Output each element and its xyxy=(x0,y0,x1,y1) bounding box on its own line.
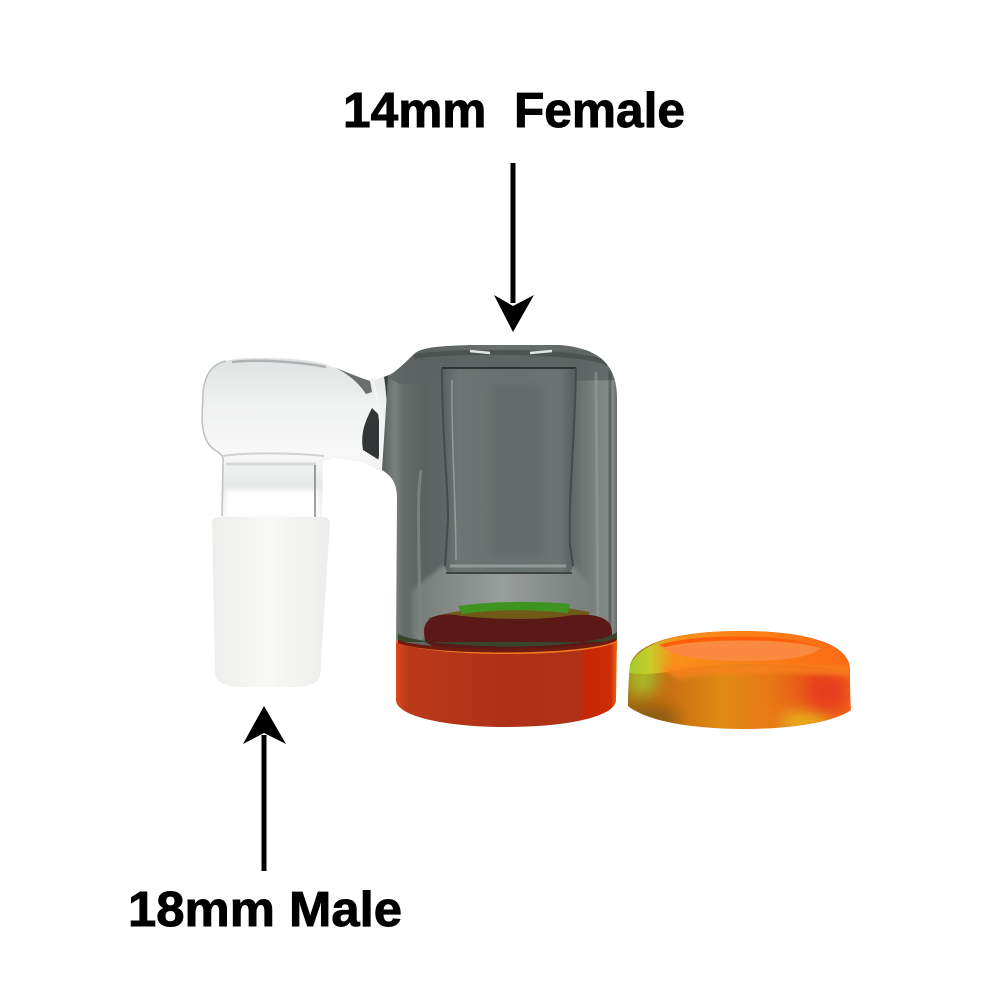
smoked glass body xyxy=(380,340,620,660)
infographic: glass ash catcher with joint size labels xyxy=(130,91,851,927)
frosted male joint xyxy=(212,517,330,687)
lid recess xyxy=(659,636,821,661)
dark glass weld xyxy=(362,408,379,460)
clear glass elbow and neck xyxy=(202,358,398,518)
silicone lid xyxy=(628,631,851,729)
label: 14mm Female: 14mm Female xyxy=(343,84,685,138)
product: glass ash catcher xyxy=(202,340,620,727)
label: 18mm Male: 18mm Male xyxy=(128,883,402,937)
lower chamber highlight xyxy=(412,565,594,640)
silicone insert seen through glass xyxy=(398,602,617,650)
orange silicone base xyxy=(396,640,617,727)
arrow: up to male joint xyxy=(243,706,286,871)
inner downstem cup xyxy=(442,367,576,574)
arrow: down to female joint xyxy=(494,163,534,332)
